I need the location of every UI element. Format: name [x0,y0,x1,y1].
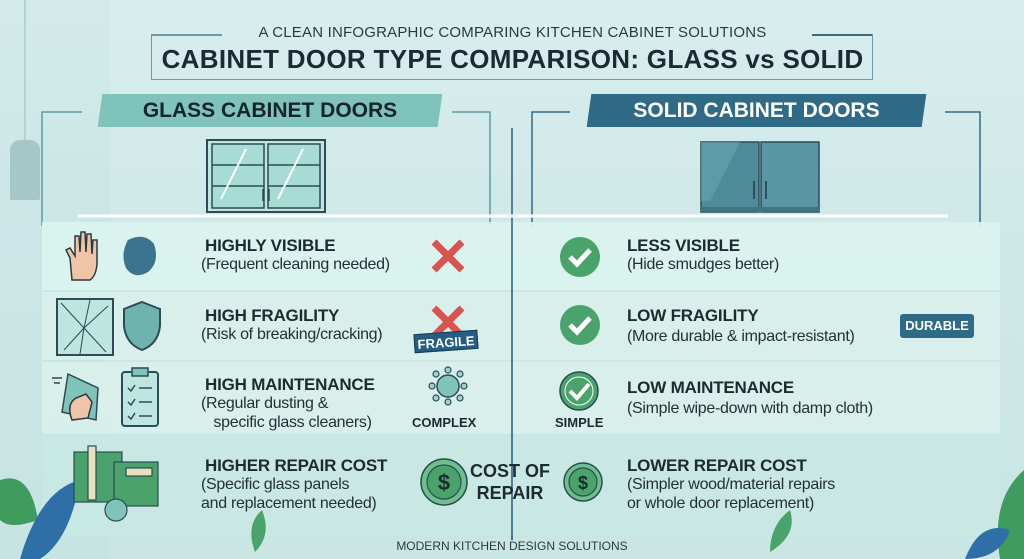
row 1 left [65,231,464,281]
icon: cracked glass [56,298,114,356]
header: solid [587,94,926,127]
row 4 right: or whole door replacement) [627,495,814,512]
row 4 left: and replacement needed) [201,495,376,512]
row 2 left: (Risk of breaking/cracking) [201,326,382,343]
icon: hand [65,231,98,281]
header: solid: SOLID CABINET DOORS [633,99,880,122]
icon: solid cabinet [700,141,820,213]
row 3 right: (Simple wipe-down with damp cloth) [627,400,873,417]
label: fragile: FRAGILE [417,333,475,352]
icon: complex gear [428,366,468,406]
icon: dollar coin large: $ [438,470,450,495]
footer: MODERN KITCHEN DESIGN SOLUTIONS [396,539,628,553]
icon: check [560,237,600,277]
row 3 left: COMPLEX [412,415,476,430]
icon: shield [123,300,161,352]
row 3 right: SIMPLE [555,415,603,430]
icon: red x [432,240,464,272]
label: cost of repair: COST OF [470,461,550,481]
label: durable: DURABLE [905,318,969,333]
row 2 right [560,305,974,345]
icon: money stack [73,445,159,522]
row 4 right: (Simpler wood/material repairs [627,476,835,493]
row 3 right: LOW MAINTENANCE [627,378,794,397]
row 4 left [73,445,550,522]
title box [151,34,873,80]
row 3 left [52,366,476,431]
subtitle: A CLEAN INFOGRAPHIC COMPARING KITCHEN CABINET SOLUTIONS [258,24,767,41]
row 1 left: HIGHLY VISIBLE [205,236,335,255]
icon: check [560,305,600,345]
icon: simple check [559,371,599,411]
icon: red x fragile [432,306,464,333]
header: glass: GLASS CABINET DOORS [143,99,397,122]
row 2 left: HIGH FRAGILITY [205,306,339,325]
row 2 left [56,298,479,356]
row 1 left: (Frequent cleaning needed) [201,256,390,273]
icon: smudge [123,236,156,276]
icon: clipboard [121,367,159,427]
row 3 left: specific glass cleaners) [213,414,372,431]
row 2 right: LOW FRAGILITY [627,306,758,325]
row 4 left: HIGHER REPAIR COST [205,456,387,475]
label: cost of repair: REPAIR [477,483,543,503]
title: CABINET DOOR TYPE COMPARISON: GLASS vs SOLID [162,44,863,74]
icon: glass cabinet [206,139,326,213]
row 3 right [555,371,873,430]
row 3 left: (Regular dusting & [201,395,328,412]
row 4 right: LOWER REPAIR COST [627,456,807,475]
row 1 right: (Hide smudges better) [627,256,779,273]
icon: cloth hand [52,372,99,421]
header: glass [98,94,442,127]
label: durable [900,314,974,338]
row 4 left: (Specific glass panels [201,476,349,493]
row 3 left: HIGH MAINTENANCE [205,375,375,394]
row 1 right: LESS VISIBLE [627,236,740,255]
icon: dollar coin small: $ [578,473,588,493]
row 2 right: (More durable & impact-resistant) [627,328,855,345]
icon: dollar coin large [420,458,468,506]
icon: dollar coin small [563,462,603,502]
label: cost of repair [470,461,550,503]
row 4 right [563,456,835,512]
row 1 right [560,236,779,277]
